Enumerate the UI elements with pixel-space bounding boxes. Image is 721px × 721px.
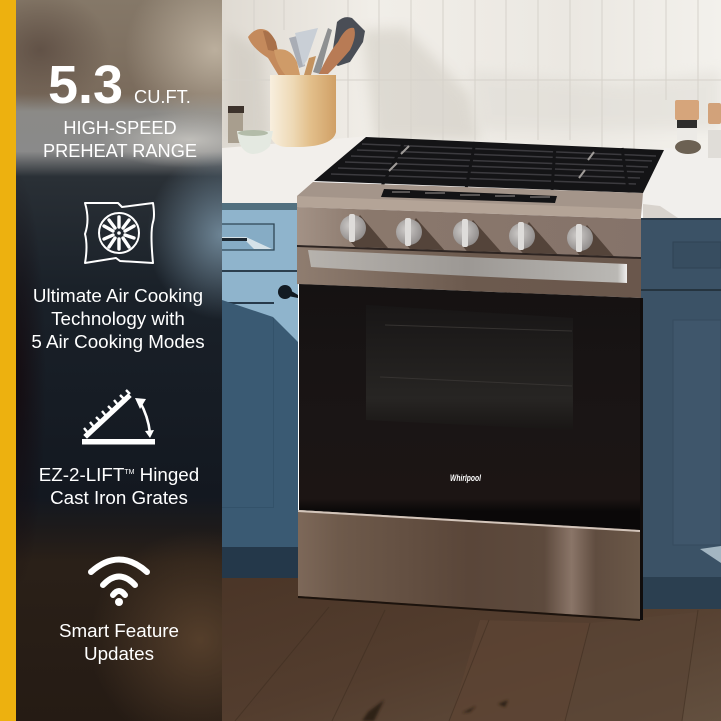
capacity stat xyxy=(43,55,197,161)
stat caption: HIGH-SPEED xyxy=(63,118,177,138)
icon: air cooking fan xyxy=(85,203,154,263)
feature: hinged grates xyxy=(39,390,199,508)
knob shadows xyxy=(351,215,614,256)
right blue cabinets xyxy=(641,218,721,609)
range appliance xyxy=(297,137,664,621)
yellow accent bar xyxy=(0,0,16,721)
feature text: hinged grates: EZ-2-LIFT xyxy=(39,464,124,485)
feature text: air cooking: Technology with xyxy=(51,308,185,329)
feature text: air cooking: 5 Air Cooking Modes xyxy=(31,331,205,352)
right countertop xyxy=(642,160,721,218)
feature text: hinged grates: TM xyxy=(124,469,135,476)
touch display xyxy=(381,189,557,203)
feature text: hinged grates: Cast Iron Grates xyxy=(50,487,188,508)
door handle xyxy=(308,250,627,283)
door top band xyxy=(297,245,641,298)
feature text: hinged grates: Hinged xyxy=(134,464,199,485)
oven door glass xyxy=(299,284,641,531)
knob panel xyxy=(297,207,641,257)
feature text: hinged grates xyxy=(39,464,199,508)
feature: smart updates xyxy=(59,560,179,664)
utensil crock with spoons xyxy=(248,17,365,147)
cooktop grates xyxy=(314,137,664,193)
spice jar and bowl xyxy=(228,106,273,154)
feature text: smart updates xyxy=(59,620,179,664)
left countertop xyxy=(222,138,348,203)
brand logo: Whirlpool xyxy=(450,473,481,483)
oven knobs xyxy=(340,214,593,252)
feature text: air cooking xyxy=(31,285,205,352)
lower drawer xyxy=(298,510,640,619)
feature text: air cooking: Ultimate Air Cooking xyxy=(33,285,203,306)
stat number: 5.3 xyxy=(48,55,123,115)
feature text: smart updates: Smart Feature xyxy=(59,620,179,641)
icon: hinged grate angle xyxy=(82,390,155,444)
icon: wifi xyxy=(91,560,147,606)
oven window xyxy=(366,324,573,416)
control panel top xyxy=(297,182,643,217)
tiled wall xyxy=(222,0,721,160)
kitchen photo scene xyxy=(222,0,721,721)
wood floor xyxy=(222,570,721,721)
right countertop jars xyxy=(675,100,721,158)
feature text: smart updates: Updates xyxy=(84,643,154,664)
stat caption: PREHEAT RANGE xyxy=(43,141,197,161)
stat caption xyxy=(43,118,197,161)
left blue cabinets xyxy=(222,203,298,578)
counter edge shadow xyxy=(643,204,678,218)
blurred side panel background xyxy=(16,0,222,721)
feature: air cooking xyxy=(31,203,205,352)
stat unit: CU.FT. xyxy=(134,86,191,107)
